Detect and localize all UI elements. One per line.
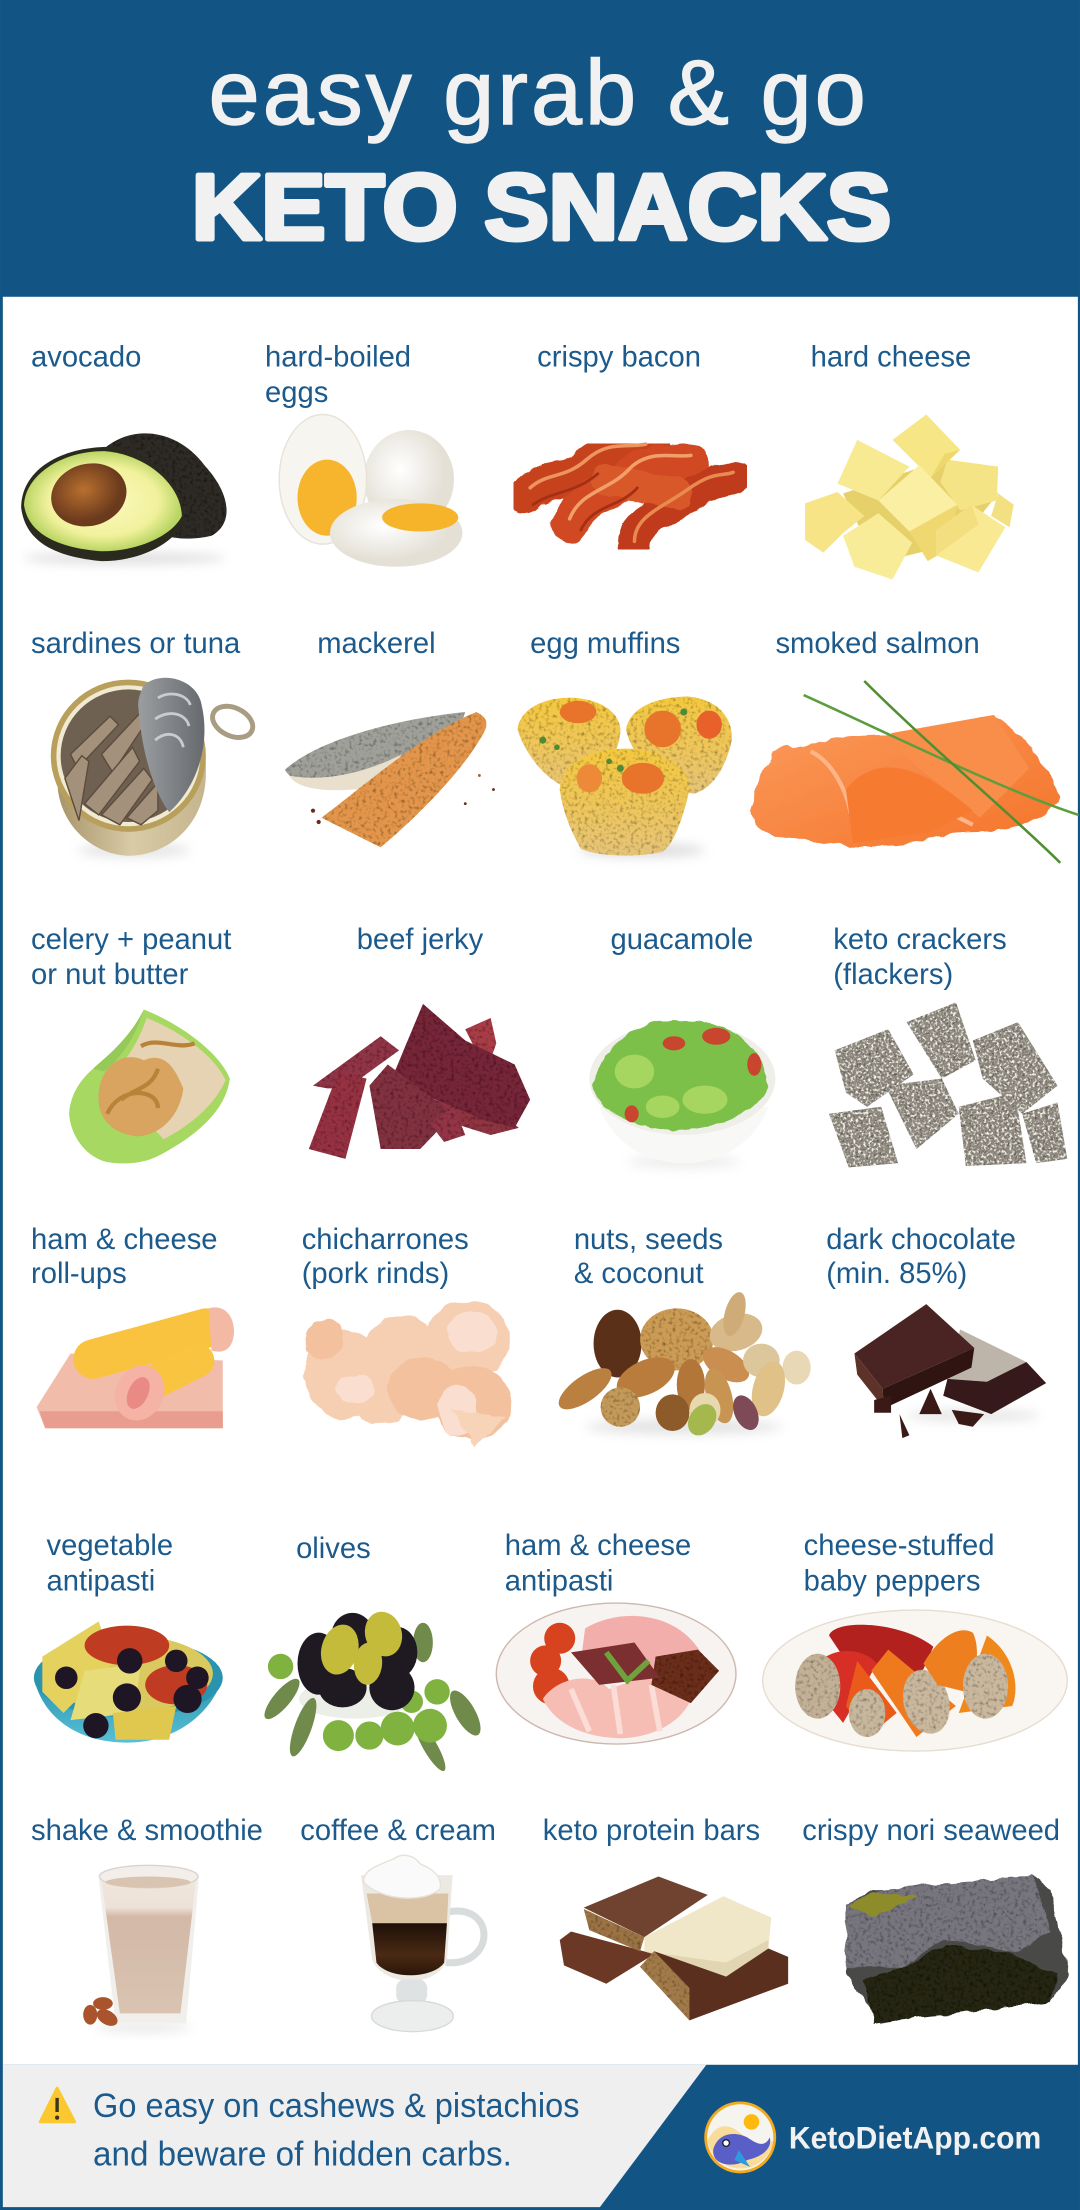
- label: hard-boiled eggs: eggs: [265, 377, 328, 409]
- label: nuts, seeds & coconut: & coconut: [574, 1258, 704, 1290]
- photo: celery with peanut butter: [69, 1009, 230, 1163]
- label: avocado: avocado: [31, 342, 141, 374]
- photo: dark chocolate: [854, 1304, 1046, 1438]
- label: coffee & cream: coffee & cream: [300, 1815, 496, 1847]
- footer warning text line 1: Go easy on cashews & pistachios: [93, 2087, 579, 2125]
- photo: olives: [259, 1608, 487, 1774]
- label: chicharrones (pork rinds): (pork rinds): [302, 1258, 449, 1290]
- label: keto crackers (flackers): keto crackers: [833, 924, 1007, 956]
- photo: vegetable antipasti bowl: [34, 1621, 223, 1743]
- label: chicharrones (pork rinds): chicharrones: [302, 1224, 469, 1256]
- footer note panel: [3, 2065, 706, 2207]
- photo: mackerel fillets: [285, 712, 495, 847]
- footer banner: [0, 2065, 1080, 2210]
- cheese cube shadows and gaps: [843, 458, 998, 557]
- label: hard cheese: hard cheese: [811, 342, 971, 374]
- label: keto crackers (flackers): (flackers): [833, 959, 953, 991]
- icon: warning triangle: [40, 2088, 75, 2122]
- label: cheese-stuffed baby peppers: baby peppers: [804, 1565, 980, 1597]
- label: smoked salmon: smoked salmon: [775, 628, 980, 660]
- photo: beef jerky: [309, 1004, 530, 1159]
- icon: KetoDietApp logo: [704, 2101, 776, 2173]
- label: celery + peanut or nut butter: or nut butter: [31, 959, 189, 991]
- label: vegetable antipasti: antipasti: [47, 1565, 155, 1597]
- photo: ham and cheese roll-ups: [37, 1307, 234, 1429]
- title line 2: KETO SNACKS: [192, 155, 891, 259]
- label: celery + peanut or nut butter: celery + peanut: [31, 924, 231, 956]
- photo: crispy bacon: [524, 444, 736, 544]
- label: cheese-stuffed baby peppers: cheese-stuffed: [804, 1530, 994, 1562]
- label: ham & cheese roll-ups: roll-ups: [31, 1258, 127, 1290]
- label: crispy bacon: crispy bacon: [537, 342, 701, 374]
- photo: guacamole bowl: [589, 1020, 775, 1167]
- photo: irish coffee: [361, 1855, 484, 2032]
- photo: sardine can: [51, 678, 258, 857]
- site name: KetoDietApp.com: [789, 2121, 1041, 2156]
- label: ham & cheese antipasti: antipasti: [505, 1565, 613, 1597]
- label: hard-boiled eggs: hard-boiled: [265, 342, 411, 374]
- label: crispy nori seaweed: crispy nori seaweed: [802, 1815, 1060, 1847]
- photo: egg muffins: [517, 696, 732, 857]
- photo: nori seaweed: [846, 1875, 1069, 2023]
- photo: seed crackers: [829, 1002, 1067, 1167]
- photo: antipasti plate: [496, 1603, 736, 1744]
- photo: smoked salmon: [750, 681, 1079, 863]
- photo: mixed nuts: [552, 1290, 811, 1441]
- label: dark chocolate (min. 85%): (min. 85%): [826, 1258, 967, 1290]
- footer warning text line 2: and beware of hidden carbs.: [93, 2136, 512, 2174]
- label: nuts, seeds & coconut: nuts, seeds: [574, 1224, 723, 1256]
- photo: protein bars: [560, 1877, 788, 2020]
- photo: smoothie glass: [83, 1865, 199, 2032]
- label: dark chocolate (min. 85%): dark chocolate: [826, 1224, 1016, 1256]
- photo: avocado: [21, 433, 227, 564]
- label: guacamole: guacamole: [610, 924, 753, 956]
- label: olives: olives: [296, 1533, 371, 1565]
- photo: chicharrones: [305, 1301, 512, 1447]
- label: egg muffins: egg muffins: [530, 628, 680, 660]
- label: keto protein bars: keto protein bars: [543, 1815, 760, 1847]
- label: sardines or tuna: sardines or tuna: [31, 628, 241, 660]
- header banner: [0, 0, 1080, 297]
- label: ham & cheese roll-ups: ham & cheese: [31, 1224, 218, 1256]
- photo: stuffed peppers plate: [763, 1610, 1067, 1751]
- label: vegetable antipasti: vegetable: [47, 1530, 173, 1562]
- photo: hard-boiled eggs: [279, 415, 462, 567]
- label: beef jerky: beef jerky: [357, 924, 484, 956]
- label: mackerel: mackerel: [317, 628, 436, 660]
- label: shake & smoothie: shake & smoothie: [31, 1815, 263, 1847]
- title line 1: easy grab & go: [209, 42, 866, 144]
- label: ham & cheese antipasti: ham & cheese: [505, 1530, 691, 1562]
- photo: cheese cubes: [805, 415, 1014, 579]
